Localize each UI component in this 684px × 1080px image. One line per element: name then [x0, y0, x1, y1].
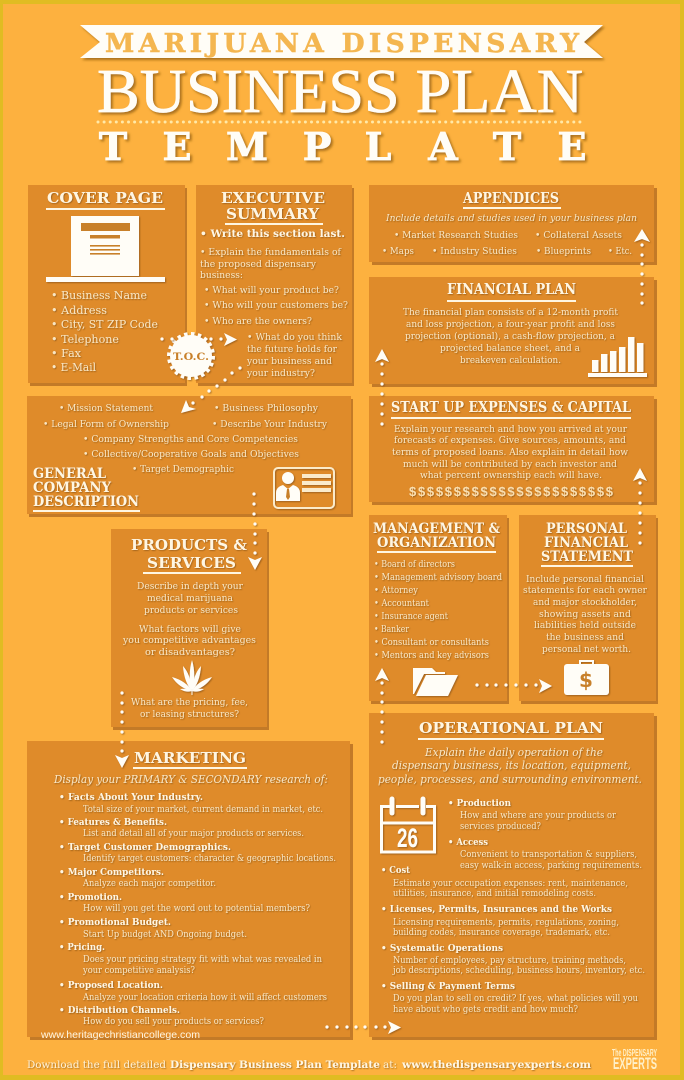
icon: folder: [413, 668, 458, 696]
text: start up description: much will be contributed by each investor and: [403, 459, 617, 470]
list: marketing research items: [59, 792, 336, 1027]
list: appendices items: • Etc.: [608, 246, 632, 257]
panel: executive summary: [196, 185, 354, 386]
list: cover page contents: [51, 288, 158, 374]
heading: products and services: SERVICES: [147, 554, 236, 572]
list: marketing research items: List and detail all of your major products or services.: [83, 829, 304, 839]
heading: personal financial statement: PERSONAL: [546, 521, 627, 537]
text: executive summary points: the future holds for: [247, 344, 337, 355]
heading: products and services: PRODUCTS &: [131, 536, 247, 554]
list: operational plan items: utilities, insurance, and initial remodeling costs.: [393, 889, 596, 899]
list: operational plan items: • Access: [448, 837, 488, 848]
text: personal statement description: and major stockholder,: [533, 597, 637, 608]
text: executive summary points: • Who are the owners?: [204, 316, 312, 327]
icon: briefcase with dollar: [564, 661, 609, 695]
badge: table of contents seal: T.O.C.: [173, 351, 209, 363]
heading: general company description: COMPANY: [33, 480, 112, 496]
text: personal statement description: [523, 574, 647, 655]
list: operational plan items: • Systematic Operations: [381, 943, 503, 954]
text: start up description: [392, 424, 628, 481]
heading: management and organization: MANAGEMENT &: [373, 521, 500, 537]
list: management roles: [374, 560, 502, 661]
list: management roles: • Banker: [374, 625, 410, 635]
heading: general company description: DESCRIPTION: [33, 494, 139, 510]
arrow: products to marketing: [115, 691, 129, 768]
text: executive summary points: • Who will your customers be?: [204, 300, 348, 311]
list: marketing research items: • Pricing.: [59, 942, 105, 953]
watermark url: www.heritagechristiancollege.com: [40, 1029, 200, 1041]
panel: management and organization: [369, 515, 509, 704]
arrow: marketing to operational plan: [325, 1021, 401, 1034]
list: operational plan items: job descriptions, scheduling, business hours, inventory, etc.: [392, 966, 645, 976]
footer: download line: at:: [383, 1060, 397, 1071]
list: management roles: • Consultant or consultants: [374, 638, 489, 648]
text: products description: medical marijuana: [147, 593, 233, 604]
list: management roles: • Accountant: [374, 599, 429, 609]
list: company description items: • Mission Statement: [59, 403, 153, 414]
list: operational plan items: • Licenses, Permits, Insurances and the Works: [381, 904, 612, 915]
text: products description: products or services: [144, 605, 238, 616]
list: operational plan items: • Production: [448, 798, 511, 809]
text: marketing intro: Display your PRIMARY & SECONDARY research of:: [53, 773, 328, 786]
text: personal statement description: Include personal financial: [526, 574, 644, 585]
panel: start up expenses and capital: [369, 396, 657, 505]
text: executive summary points: • Write this section last.: [200, 228, 345, 240]
list: operational plan items: [381, 798, 645, 1015]
list: marketing research items: your competitive analysis?: [82, 966, 195, 976]
list: marketing research items: • Target Customer Demographics.: [59, 842, 231, 853]
list: cover page contents: • E-Mail: [51, 360, 96, 374]
heading: management and organization: [373, 521, 500, 553]
arrow: personal financial statement to start up: [633, 468, 647, 545]
text: pricing question: [131, 697, 248, 720]
heading: cover page: COVER PAGE: [47, 189, 163, 207]
list: company description items: [43, 403, 328, 475]
text: products description: [122, 581, 256, 658]
footer: download line: www.thedispensaryexperts.com: [401, 1060, 591, 1071]
list: appendices items: • Market Research Studies: [394, 230, 518, 241]
text: financial plan description: breakeven calculation.: [460, 355, 561, 366]
heading: products and services: [131, 536, 247, 574]
text: financial plan description: projected balance sheet, and a: [440, 343, 580, 354]
panel: cover page: [28, 185, 187, 386]
icon: calendar: [381, 799, 435, 853]
panel: general company description: [27, 396, 353, 517]
list: marketing research items: How do you sell your products or services?: [83, 1017, 264, 1027]
heading: marketing: MARKETING: [134, 749, 246, 767]
arrow: start up to financial plan: [375, 349, 389, 426]
heading: start up expenses and capital: START UP EXPENSES & CAPITAL: [391, 398, 631, 416]
icon: bar chart: [588, 337, 647, 377]
heading: operational plan: OPERATIONAL PLAN: [419, 719, 603, 737]
text: operational plan intro: dispensary business, its location, equipment,: [392, 759, 631, 772]
text: executive summary points: • What do you think: [247, 332, 342, 343]
list: appendices items: [382, 230, 632, 257]
text: operational plan intro: [378, 746, 642, 786]
badge: table of contents seal: [169, 334, 213, 378]
heading: appendices: APPENDICES: [462, 189, 559, 207]
heading: personal financial statement: STATEMENT: [541, 549, 634, 565]
list: management roles: • Insurance agent: [374, 612, 448, 622]
text: executive summary points: • Explain the fundamentals of: [200, 247, 342, 258]
list: management roles: • Attorney: [374, 586, 419, 596]
text: personal statement description: showing assets and: [539, 609, 631, 620]
heading: personal financial statement: FINANCIAL: [544, 535, 628, 551]
list: appendices items: • Industry Studies: [432, 246, 517, 257]
text: start up description: Explain your research and how you arrived at your: [394, 424, 627, 435]
list: operational plan items: How and where are your products or: [460, 811, 617, 821]
text: financial plan description: [403, 307, 618, 366]
list: cover page contents: • Telephone: [51, 332, 119, 346]
arrow: cover page through T.O.C. to executive summary: [160, 333, 237, 346]
text: executive summary points: the proposed dispensary: [200, 259, 317, 270]
text: start up description: what percent ownership each will have.: [420, 470, 602, 481]
list: appendices items: • Collateral Assets: [535, 230, 622, 241]
text: personal statement description: personal net worth.: [542, 644, 631, 655]
footer: download line: [27, 1060, 591, 1071]
text: executive summary points: [200, 228, 348, 379]
text: start up description: forecasts of expenses. Give sources, amounts, and: [394, 435, 626, 446]
list: operational plan items: Convenient to transportation & suppliers,: [460, 850, 637, 860]
list: operational plan items: Number of employees, pay structure, training methods,: [393, 956, 626, 966]
text: financial plan description: The financial plan consists of a 12-month profit: [403, 307, 618, 318]
text: executive summary points: business:: [200, 270, 243, 281]
heading: general company description: GENERAL: [33, 466, 106, 482]
arrow: operational plan to management: [375, 668, 389, 744]
list: marketing research items: • Features & Benefits.: [59, 817, 167, 828]
text: financial plan description: and loss projection, a four-year profit and loss: [406, 319, 615, 330]
icon: calendar: 26: [397, 823, 418, 853]
text: products description: What factors will give: [139, 624, 241, 635]
list: operational plan items: easy walk-in access, parking requirements.: [460, 861, 642, 871]
heading: executive summary: SUMMARY: [226, 205, 319, 223]
list: marketing research items: Analyze each major competitor.: [82, 879, 216, 889]
footer: download line: Download the full detailed: [27, 1060, 167, 1071]
list: company description items: • Collective/Cooperative Goals and Objectives: [83, 449, 299, 460]
list: operational plan items: Do you plan to sell on credit? If yes, what policies will you: [393, 994, 638, 1004]
heading: general company description: [33, 466, 140, 512]
icon: cannabis leaf: [172, 660, 212, 695]
text: personal statement description: the business and: [546, 632, 624, 643]
list: operational plan items: • Selling & Payment Terms: [381, 981, 515, 992]
list: marketing research items: Start Up budget AND Ongoing budget.: [83, 930, 247, 940]
list: company description items: • Describe Your Industry: [212, 419, 328, 430]
text: operational plan intro: people, processes, and surrounding environment.: [378, 773, 642, 786]
text: executive summary points: your industry?: [246, 368, 315, 379]
list: appendices items: • Blueprints: [536, 246, 591, 257]
text: executive summary points: your business and: [246, 356, 332, 367]
list: appendices items: • Maps: [382, 246, 414, 257]
footer: download line: Dispensary Business Plan Template: [170, 1060, 380, 1071]
panel: marketing: [27, 741, 353, 1041]
list: operational plan items: Licensing requirements, permits, regulations, zoning,: [393, 918, 619, 928]
panel: personal financial statement: [519, 515, 658, 704]
heading: executive summary: [221, 189, 325, 225]
list: company description items: • Business Philosophy: [214, 403, 319, 414]
title: template: TEMPLATE: [99, 124, 586, 169]
heading: financial plan: FINANCIAL PLAN: [447, 280, 576, 298]
list: marketing research items: Identify target customers: character & geographic locations.: [83, 854, 336, 864]
list: marketing research items: • Promotion.: [59, 892, 122, 903]
heading: personal financial statement: [541, 521, 634, 567]
list: cover page contents: • City, ST ZIP Code: [51, 317, 158, 331]
arrow: company description to products: [248, 492, 262, 570]
text: products description: you competitive advantages: [122, 635, 256, 646]
list: marketing research items: • Facts About Your Industry.: [59, 792, 203, 803]
list: operational plan items: have about who gets credit and how much?: [393, 1005, 578, 1015]
text: executive summary points: • What will your product be?: [204, 285, 339, 296]
icon: id card: [274, 468, 334, 508]
text: personal statement description: statements for each owner: [523, 585, 647, 596]
list: operational plan items: building codes, insurance coverage, trademark, etc.: [393, 928, 610, 938]
title ribbon: MARIJUANA DISPENSARY: [105, 28, 580, 59]
text: pricing question: or leasing structures?: [140, 709, 239, 720]
list: management roles: • Board of directors: [374, 560, 455, 570]
panel: appendices: [369, 185, 657, 265]
list: marketing research items: How will you get the word out to potential members?: [83, 904, 310, 914]
panel: products and services: [111, 529, 269, 730]
list: operational plan items: services produced?: [460, 822, 541, 832]
arrow: T.O.C. to company description: [181, 366, 242, 413]
list: cover page contents: • Address: [51, 303, 107, 317]
list: marketing research items: Total size of your market, current demand in market, etc.: [83, 805, 323, 815]
list: marketing research items: Does your pricing strategy fit with what was revealed in: [83, 955, 322, 965]
list: operational plan items: Estimate your occupation expenses: rent, maintenance,: [393, 879, 628, 889]
list: management roles: • Mentors and key advisors: [374, 651, 489, 661]
logo: the dispensary experts: [612, 1048, 657, 1073]
heading: executive summary: EXECUTIVE: [221, 189, 325, 207]
list: marketing research items: • Proposed Location.: [59, 980, 163, 991]
list: operational plan items: • Cost: [381, 865, 411, 876]
list: marketing research items: • Distribution Channels.: [59, 1005, 180, 1016]
dollar signs row: $$$$$$$$$$$$$$$$$$$$$$$: [409, 484, 614, 499]
list: company description items: • Company Strengths and Core Competencies: [83, 434, 298, 445]
title: [80, 25, 603, 169]
list: cover page contents: • Business Name: [51, 288, 147, 302]
icon: briefcase with dollar: $: [579, 668, 593, 692]
text: start up description: terms of proposed loans. Also explain in detail how: [392, 447, 628, 458]
arrow: financial plan to appendices: [634, 229, 650, 305]
text: products description: Describe in depth your: [137, 581, 243, 592]
text: products description: or disadvantages?: [145, 647, 235, 658]
list: company description items: • Legal Form of Ownership: [43, 419, 169, 430]
panel: financial plan: [369, 277, 657, 387]
icon: cover document: [46, 216, 165, 282]
panel: operational plan: [369, 713, 657, 1040]
list: marketing research items: • Major Competitors.: [59, 867, 164, 878]
text: pricing question: What are the pricing, fee,: [131, 697, 248, 708]
list: marketing research items: • Promotional Budget.: [59, 917, 171, 928]
title: business plan: BUSINESS PLAN: [97, 58, 583, 126]
text: financial plan description: projection (optional), a cash-flow projection, a: [405, 331, 615, 342]
text: appendices intro: Include details and studies used in your business plan: [385, 213, 637, 224]
heading: management and organization: ORGANIZATION: [377, 535, 496, 551]
list: management roles: • Management advisory board: [374, 573, 502, 583]
arrow: management to personal financial statement: [475, 679, 552, 693]
text: personal statement description: liabilities held outside: [534, 620, 636, 631]
list: marketing research items: Analyze your location criteria how it will affect customers: [82, 993, 327, 1003]
text: operational plan intro: Explain the daily operation of the: [424, 746, 603, 759]
list: company description items: • Target Demographic: [132, 464, 234, 475]
list: cover page contents: • Fax: [51, 346, 81, 360]
